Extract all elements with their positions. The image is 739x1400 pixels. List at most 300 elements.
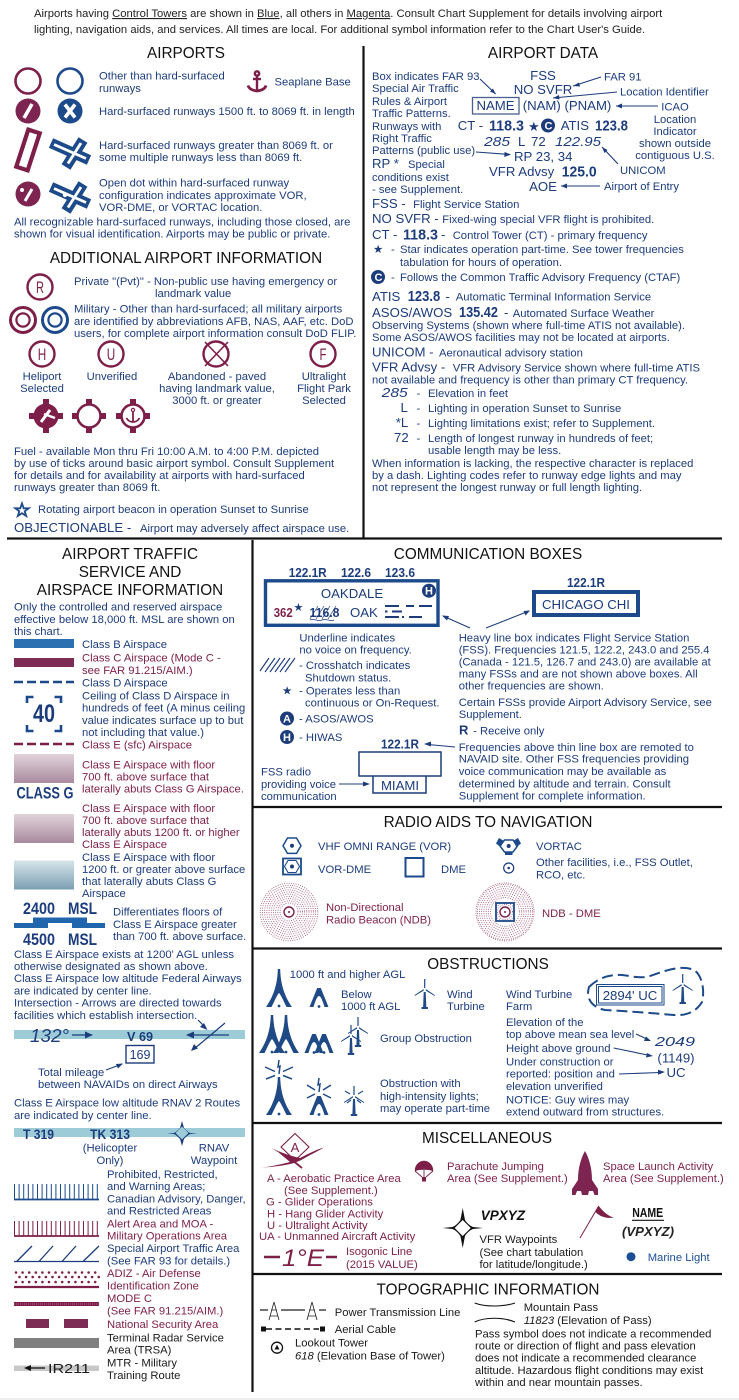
def: atis (372, 288, 651, 305)
icon: seaplane anchor (248, 71, 266, 91)
text: rp special conditions: - see Supplement. (372, 184, 463, 196)
label: helicopter only: Only) (97, 1155, 124, 1167)
box: oakdale: H (425, 586, 433, 598)
label: icao: Indicator (653, 126, 697, 138)
text: ndb-dme: NDB - DME (542, 908, 601, 920)
text: mountain pass: Mountain Pass (524, 1302, 598, 1314)
text: mode c: MODE C (107, 1293, 152, 1305)
panel: communication boxes (260, 546, 712, 803)
text: rp special conditions: Special (408, 159, 445, 171)
label: heliport selected: Selected (20, 383, 64, 395)
label: icao: Location (654, 114, 696, 126)
icon: small tower (310, 988, 328, 1008)
diagram: federal airway v69 (14, 1020, 245, 1070)
label: heliport selected: Heliport (23, 371, 62, 383)
text: isogonic: (2015 VALUE) (346, 1259, 418, 1271)
symbol: mtr: IR211 (48, 1361, 90, 1376)
icon: ndb (260, 883, 318, 941)
sample: fss: FSS (530, 68, 556, 83)
panel: airport traffic service and airspace information (14, 546, 246, 1382)
def: ct: - (441, 227, 445, 242)
icon: other facilities (504, 863, 514, 873)
def: 72: 72 (394, 430, 409, 445)
heading: airport data: AIRPORT DATA (488, 45, 599, 62)
text: national security area: National Security Area (107, 1319, 219, 1331)
sample: ct frequency line: ATIS (561, 118, 589, 133)
label: rnav waypoint: Waypoint (191, 1155, 238, 1167)
text: marine light: Marine Light (648, 1252, 710, 1264)
text: fuel: by use of ticks around basic airport symbol. Consult Supplement (14, 458, 335, 470)
sample: elevation lighting runway unicom (483, 134, 602, 149)
text: information lacking note: When information is lacking, the respective character is replaced (372, 458, 693, 470)
icon: star: ★ (282, 686, 292, 698)
text: trsa: Area (TRSA) (107, 1345, 172, 1357)
sample: elevation lighting runway unicom: 285 (483, 134, 511, 149)
icon: lookout tower (272, 1342, 282, 1353)
sample: ct frequency line: ★ (528, 119, 540, 134)
sample: ct frequency line: CT - (458, 118, 483, 133)
text: prohibited areas: Prohibited, Restricted, (107, 1169, 218, 1181)
text: heavy line box: (FSS). Frequencies 121.5, 122.2, 243.0 and 255.4 (459, 644, 709, 656)
text: heavy line box: Heavy line box indicates Flight Service Station (459, 632, 689, 644)
def: star: tabulation for hours of operation. (400, 257, 562, 269)
panel: airport data (371, 45, 715, 494)
text: activity list: A - Aerobatic Practice Area (267, 1173, 402, 1185)
text: differentiates floors: Differentiates floors of (113, 907, 223, 919)
icon: hiwas H (280, 730, 294, 744)
def: atis: 123.8 (408, 288, 440, 305)
sample: elevation lighting runway unicom: 72 (531, 134, 546, 149)
swatch: class e 1200 (14, 860, 74, 890)
label: ultralight: Flight Park (297, 383, 351, 395)
def: asos awos: 135.42 (459, 304, 498, 321)
text: activity list: G - Glider Operations (266, 1197, 373, 1209)
diagram: msl floors (14, 900, 105, 949)
icon: heliport H: H (38, 345, 46, 364)
frequency above miami: 122.1R (381, 738, 419, 752)
text: class e 1200: 1200 ft. or greater above surface (82, 864, 245, 876)
text: pass symbol note: altitude. Hazardous flight conditions may exist (475, 1365, 704, 1377)
text: special airport traffic area: (See FAR 93 for details.) (107, 1256, 230, 1268)
text: below 1000: Below (341, 989, 373, 1001)
sample: name vpxyz: (VPXYZ) (622, 1224, 674, 1239)
heading: radio aids: RADIO AIDS TO NAVIGATION (384, 814, 592, 831)
frequencies above oakdale box: 123.6 (385, 566, 415, 580)
text: hard-surfaced greater than 8069: some multiple runways less than 8069 ft. (99, 152, 302, 164)
text: class e 700 abuts g: laterally abuts Class G Airspace. (82, 784, 244, 796)
text: certain fsss: Supplement. (459, 709, 522, 721)
text: class e 1200: Class E Airspace with floor (82, 852, 215, 864)
text: open dot explanation: configuration indicates approximate VOR, (99, 190, 307, 202)
icon: ultralight F (310, 342, 336, 366)
sample: vfr advsy (489, 164, 597, 180)
def: ctaf: C (375, 272, 383, 284)
icon: blue multiple runways (51, 140, 89, 167)
label: ultralight: Selected (302, 395, 346, 407)
sample: ct frequency line: C (545, 120, 553, 132)
label: location identifier: Location Identifier (620, 87, 709, 99)
def: vfr advsy: not available and frequency is other than primary CT frequency. (372, 374, 688, 386)
text: power transmission line: Power Transmission Line (335, 1307, 460, 1319)
def: vfr advsy: VFR Advisory Service shown where full-time ATIS (453, 363, 700, 375)
arrows: elevation callouts (614, 1034, 665, 1075)
text: space launch: Area (See Supplement.) (603, 1173, 724, 1185)
def: star (373, 244, 684, 269)
diagram: msl floors: 2400 (23, 900, 55, 918)
icon: vor (283, 838, 301, 853)
diagram: rnav route band (14, 1121, 245, 1146)
text: trsa: Terminal Radar Service (107, 1332, 224, 1344)
text: ceiling of class d: Ceiling of Class D Airspace in (82, 691, 230, 703)
def: 72: usable length may be less. (428, 445, 561, 457)
def: asos awos: Observing Systems (shown where full-time ATIS not available). (372, 320, 685, 332)
def: atis: - (446, 289, 450, 304)
heading: airports: AIRPORTS (147, 45, 225, 62)
text: class e 1200 agl note: Class E Airspace exists at 1200' AGL unless (14, 949, 234, 961)
box: miami: MIAMI (381, 778, 419, 793)
box: oakdale: OAKDALE (321, 586, 383, 601)
icon: aerobatic glider (259, 1134, 324, 1168)
icon: tall tower (266, 969, 292, 1007)
text: vortac: VORTAC (536, 841, 582, 853)
panel: radio aids to navigation (260, 814, 693, 941)
icon: space launch rocket (572, 1151, 598, 1195)
text: frequencies above thin line box: determined by altitude and terrain. Consult (459, 778, 672, 790)
icon: heliport H (30, 342, 54, 366)
def: elevation 285: 285 (381, 385, 408, 400)
text: pass symbol note: Pass symbol does not indicate a recommended (475, 1328, 711, 1340)
text: class e 700 abuts e: laterally abuts 1200 ft. or higher (82, 827, 240, 839)
text: vfr waypoints: for latitude/longitude.) (480, 1259, 588, 1271)
label: rnav waypoint: RNAV (199, 1143, 230, 1155)
text: elevation explanation: top above mean sea level (506, 1029, 634, 1041)
icon: ceiling 40 (27, 697, 61, 731)
icon: ultralight F: F (320, 345, 326, 364)
icon: asos A (280, 712, 294, 726)
text: information lacking note: not represent the longest runway or full length lighting. (372, 482, 642, 494)
symbol: trsa (14, 1338, 99, 1348)
panel: airports (14, 45, 355, 240)
text: high intensity: high-intensity lights; (380, 1091, 479, 1103)
text: other facilities: RCO, etc. (536, 870, 585, 882)
text: wind turbine farm: Farm (506, 1001, 532, 1013)
text: seaplane base: Seaplane Base (274, 76, 351, 88)
symbol: mtr (14, 1361, 99, 1376)
sample: rp: RP 23, 34 (514, 149, 572, 164)
icon: ceiling 40: 40 (33, 700, 55, 728)
box: oakdale: 116.8 (310, 606, 340, 620)
arrows: airport data callouts (476, 77, 658, 188)
text: recognizable runways note: shown for visual identification. Airports may be public or private. (14, 228, 330, 240)
frequencies above oakdale box: 122.6 (341, 566, 371, 580)
text: aerial cable: Aerial Cable (335, 1324, 396, 1336)
text: fuel: for details and for availability at airports with hard-surfaced (14, 470, 305, 482)
icon: high intensity turbine (344, 1086, 364, 1116)
text: pass symbol note: within and near mountain passes. (474, 1377, 643, 1389)
label: icao: shown outside (639, 138, 711, 150)
icon: magenta long runway (16, 130, 40, 170)
icon: fuel seaplane (116, 399, 150, 433)
icon: blue hard-surfaced airport (58, 98, 82, 124)
symbol: national security area (26, 1319, 88, 1328)
text: vor-dme: VOR-DME (318, 864, 372, 876)
symbol: prohibited areas (14, 1192, 99, 1200)
text: class e 1200 agl note: are indicated by center line. (14, 986, 152, 998)
icon: wind turbine (415, 979, 435, 1009)
text: box indicates far 93: Traffic Patterns. (372, 108, 451, 120)
text: ndb: Radio Beacon (NDB) (326, 914, 431, 926)
heading: obstructions: OBSTRUCTIONS (427, 956, 549, 973)
text: class e 700 abuts e: Class E Airspace with floor (82, 803, 215, 815)
def: asos awos: ASOS/AWOS (372, 305, 452, 320)
def: asos awos: Automated Surface Weather (513, 308, 655, 320)
def: ct: Control Tower (CT) - primary frequency (453, 230, 648, 242)
label: unverified: Unverified (87, 371, 137, 383)
text: crosshatch: Shutdown status. (305, 672, 391, 684)
icon: blue open circle (58, 68, 82, 94)
text: controlled airspace note: effective below 18,000 ft. MSL are shown on (14, 614, 235, 626)
sample: 1149: (1149) (657, 1051, 695, 1066)
diagram: federal airway v69: 169 (130, 1048, 150, 1062)
text: prohibited areas: Canadian Advisory, Danger, (107, 1194, 246, 1206)
def: unicom: Aeronautical advisory station (439, 348, 583, 360)
diagram: rnav route band: T 319 (23, 1127, 54, 1142)
def: atis: ATIS (372, 289, 401, 304)
def: asos awos: - (504, 305, 508, 320)
def: L: L (400, 400, 408, 415)
text: private: Private "(Pvt)" - Non-public use having emergency or (74, 276, 337, 288)
icon: unverified U: U (107, 345, 115, 364)
text: special airport traffic area: Special Airport Traffic Area (107, 1243, 240, 1255)
def: *L: *L (396, 415, 408, 430)
text: open dot explanation: VOR-DME, or VORTAC location. (99, 202, 262, 214)
text: ceiling of class d: value indicates surface up to but (82, 715, 244, 727)
text: class c: see FAR 91.215/AIM.) (82, 665, 193, 677)
def: unicom: UNICOM - (372, 345, 434, 360)
def: L: Lighting in operation Sunset to Sunrise (428, 403, 621, 415)
swatch: class e 700 abuts e (14, 814, 74, 843)
def: *L: Lighting limitations exist; refer to Supplement. (428, 418, 655, 430)
icon: crosshatch (260, 658, 295, 672)
label: ultralight: Ultralight (302, 371, 347, 383)
text: box indicates far 93: Patterns (public use) (372, 145, 475, 157)
text: class e 700 abuts g: Class E Airspace with floor (82, 759, 215, 771)
text: heavy line box: other frequencies are shown. (459, 681, 604, 693)
heading: miscellaneous: MISCELLANEOUS (422, 1130, 552, 1147)
text: operates less than continuous: - Operates less than (299, 686, 400, 698)
text: elevation explanation: elevation unverified (506, 1081, 603, 1093)
text: ceiling of class d: hundreds of feet (A minus ceiling (82, 703, 245, 715)
box: oakdale: OAK (350, 605, 378, 620)
intro note: Airports having Control Towers are shown in Blue, all others in Magenta. Consult Chart Supplement for details involving airport (34, 8, 662, 20)
arrows: heavy line box (442, 610, 530, 628)
symbol: special airport traffic area (14, 1246, 99, 1262)
diagram: msl floors: MSL (68, 900, 97, 918)
text: isogonic line symbol: 1°E (282, 1245, 325, 1272)
text: elevation explanation: Under construction or (506, 1057, 614, 1069)
icon: asos A: A (283, 713, 291, 725)
icon: magenta hard-surfaced airport (16, 98, 40, 124)
text: elevation explanation: NOTICE: Guy wires may (506, 1095, 630, 1107)
box: oakdale: 362 (274, 606, 293, 620)
arrow: thin line frequency (424, 742, 455, 747)
text: elevation explanation: extend outward from structures. (506, 1107, 664, 1119)
text: total mileage: Total mileage (38, 1067, 104, 1079)
text: controlled airspace note: this chart. (14, 626, 63, 638)
sample: 2049: 2049 (654, 1034, 696, 1049)
def: ct: 118.3 (403, 226, 438, 244)
text: class e 700 abuts e: 700 ft. above surface that (82, 815, 210, 827)
label: far 91: FAR 91 (604, 72, 642, 84)
icon: high intensity small tower (307, 1078, 331, 1116)
sample: ct frequency line (458, 118, 628, 134)
panel: topographic information (260, 1282, 711, 1389)
text: mountain pass: (Elevation of Pass) (554, 1315, 652, 1327)
text: pass symbol note: does not indicate a recommended clearance (475, 1353, 696, 1365)
text: open dot explanation: Open dot within hard-surfaced runway (99, 178, 289, 190)
icon: private airport R: R (36, 278, 44, 297)
text: fuel: runways greater than 8069 ft. (14, 482, 160, 494)
line: class d (14, 681, 74, 683)
sample: nam pnam: (NAM) (PNAM) (523, 98, 611, 113)
text: prohibited areas: and Warning Areas; (107, 1181, 205, 1193)
icon: ndb-dme (476, 883, 534, 941)
text: heavy line box: (Canada - 121.5, 126.7 and 243.0) are available at (459, 657, 712, 669)
symbol: mode c (14, 1302, 99, 1306)
text: class e 1200 agl note: Class E Airspace low altitude Federal Airways (14, 973, 242, 985)
text: rp special conditions: conditions exist (372, 172, 450, 184)
text: isogonic: Isogonic Line (346, 1246, 412, 1258)
text: wind turbine: Turbine (447, 1001, 485, 1013)
text: box indicates far 93: Runways with (372, 121, 441, 133)
text: adiz: ADIZ - Air Defense (107, 1268, 201, 1280)
text: activity list: U - Ultralight Activity (267, 1220, 368, 1232)
icon: high intensity tall tower (265, 1060, 293, 1115)
text: 1000 ft and higher: 1000 ft and higher AGL (290, 969, 405, 981)
text: lookout tower: Lookout Tower (295, 1338, 368, 1350)
text: rotating beacon: Rotating airport beacon in operation Sunset to Sunrise (38, 504, 309, 516)
text: asos awos: - ASOS/AWOS (299, 714, 374, 726)
def: vfr advsy (372, 360, 700, 386)
intro note: lighting, navigation aids, and services. All times are local. For additional symbol information refer to the Chart User's Guide. (34, 24, 645, 36)
heading: communication boxes: COMMUNICATION BOXES (394, 546, 582, 563)
text: lookout tower: 618 (295, 1351, 315, 1363)
def: elevation 285: - (416, 388, 420, 400)
def: 72 (394, 430, 653, 457)
sample: ct frequency line: 123.8 (595, 118, 628, 134)
box: chicago: CHICAGO CHI (542, 597, 630, 612)
text: mountain pass: 11823 (524, 1315, 555, 1327)
text: rp special conditions: RP * (372, 156, 399, 171)
icon: parachute (415, 1161, 433, 1182)
text: other than hard-surfaced: Other than hard-surfaced (99, 70, 225, 82)
text: differentiates floors: Class E Airspace greater (113, 919, 237, 931)
text: vfr waypoints: VFR Waypoints (480, 1234, 558, 1246)
text: rnav routes: Class E Airspace low altitude RNAV 2 Routes (14, 1098, 241, 1110)
sample: name box: NAME (476, 98, 515, 113)
text: parachute: Parachute Jumping (447, 1161, 544, 1173)
text: mtr: MTR - Military (107, 1358, 177, 1370)
text: fuel: Fuel - available Mon thru Fri 10:00 A.M. to 4:00 P.M. depicted (14, 446, 319, 458)
text: class e 1200: that laterally abuts Class G (82, 876, 216, 888)
def: fss: FSS - (372, 196, 406, 211)
text: class b: Class B Airspace (82, 639, 167, 651)
def: *L: - (416, 418, 420, 430)
text: elevation explanation: Elevation of the (506, 1017, 584, 1029)
icon: fuel open (72, 399, 106, 433)
text: underline: no voice on frequency. (299, 644, 412, 656)
heading: topographic information: TOPOGRAPHIC INFORMATION (377, 1282, 599, 1298)
text: hard-surfaced 1500-8069: Hard-surfaced runways 1500 ft. to 8069 ft. in length (99, 106, 355, 118)
text: total mileage: between NAVAIDs on direct Airways (38, 1079, 218, 1091)
def: ct (372, 226, 648, 244)
icon: hiwas H: H (283, 732, 291, 744)
text: crosshatch: - Crosshatch indicates (299, 660, 411, 672)
icon: dme (406, 858, 424, 876)
icon: magenta open circle (16, 68, 40, 94)
text: activity list: (See Supplement.) (284, 1185, 378, 1197)
label: helicopter only: (Helicopter (83, 1143, 137, 1155)
panel: miscellaneous (259, 1130, 724, 1272)
text: military: Military - Other than hard-surfaced; all military airports (74, 304, 343, 316)
def: 72: Length of longest runway in hundreds of feet; (428, 433, 653, 445)
def: atis: Automatic Terminal Information Service (456, 292, 651, 304)
diagram: federal airway v69: 132° (30, 1026, 69, 1046)
text: operates less than continuous: continuous or On-Request. (305, 698, 439, 710)
text: frequencies above thin line box: Supplement for complete information. (459, 790, 646, 802)
def: asos awos (372, 304, 685, 344)
text: box indicates far 93: Rules & Airport (372, 96, 448, 108)
text: private: landmark value (155, 288, 231, 300)
def: no svfr: NO SVFR - (372, 211, 439, 226)
text: activity list: UA - Unmanned Aircraft Activity (259, 1231, 416, 1243)
text: receive only: - Receive only (470, 726, 545, 738)
text: military: are identified by abbreviations AFB, NAS, AAF, etc. DoD (74, 316, 354, 328)
icon: wind turbine farm (588, 968, 703, 1015)
text: below 1000: 1000 ft AGL (341, 1001, 400, 1013)
heading: additional airport information: ADDITIONAL AIRPORT INFORMATION (50, 250, 322, 267)
icon: blue runways with open dot (51, 184, 89, 211)
icon: rotating beacon star (15, 504, 29, 516)
sample: vfr advsy: 125.0 (562, 164, 597, 180)
text: box indicates far 93: Special Air Traffic (372, 83, 459, 95)
box: chicago (534, 592, 638, 615)
text: activity list: H - Hang Glider Activity (267, 1208, 384, 1220)
heading: airport traffic service: SERVICE AND (79, 564, 181, 581)
text: class e sfc: Class E (sfc) Airspace (82, 740, 192, 752)
text: objectionable: OBJECTIONABLE - (14, 520, 131, 535)
line: class e sfc (14, 743, 74, 745)
def: L: - (416, 403, 420, 415)
sample: name vpxyz: NAME (632, 1205, 663, 1220)
text: prohibited areas: and Restricted Areas (107, 1206, 212, 1218)
heading: airport traffic service: AIRPORT TRAFFIC (62, 546, 198, 563)
text: class e 1200 agl note: Intersection - Arrows are directed towards (14, 998, 222, 1010)
text: ndb: Non-Directional (326, 902, 404, 914)
text: adiz: Identification Zone (107, 1281, 199, 1293)
text: controlled airspace note: Only the controlled and reserved airspace (14, 602, 222, 614)
text: other facilities: Other facilities, i.e., FSS Outlet, (536, 857, 693, 869)
sample: name vpxyz (622, 1205, 674, 1239)
icon: aerial cable (261, 1326, 325, 1332)
text: hiwas: - HIWAS (299, 732, 342, 744)
label: icao: ICAO (661, 102, 689, 114)
panel: additional airport information (10, 250, 356, 535)
text: frequencies above thin line box: voice communication may be available as (459, 766, 667, 778)
text: receive only: R (459, 723, 469, 738)
def: fss: Flight Service Station (410, 199, 519, 211)
text: pass symbol note: route or direction of flight and pass elevation (475, 1341, 696, 1353)
